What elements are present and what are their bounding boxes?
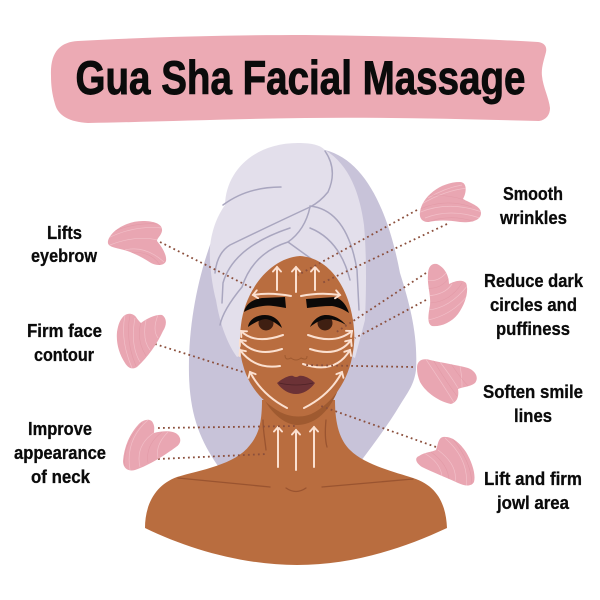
massage direction arrows (240, 267, 352, 470)
label: lifts eyebrow: eyebrow (31, 245, 98, 266)
eyebrows (244, 297, 349, 313)
label: smooth wrinkles: wrinkles (499, 207, 567, 228)
label: improve appearance of neck: Improve (28, 418, 92, 439)
label: reduce dark circles and puffiness: Reduce dark (484, 270, 584, 291)
lips (277, 376, 315, 394)
label: reduce dark circles and puffiness (484, 270, 584, 339)
label: soften smile lines: lines (514, 405, 552, 426)
gua sha stone: lifts eyebrow (108, 221, 166, 265)
towel back panel (189, 150, 416, 466)
dotted leader lines (155, 210, 447, 459)
label: soften smile lines: Soften smile (483, 381, 583, 402)
gua sha stone: lift and firm jowl area (416, 436, 474, 486)
label: smooth wrinkles: Smooth (503, 183, 563, 204)
black hair (278, 257, 322, 272)
label: soften smile lines (483, 381, 583, 426)
title banner (51, 35, 550, 123)
label: lift and firm jowl area (484, 468, 582, 513)
gua sha stone: soften smile lines (417, 359, 477, 404)
label: lift and firm jowl area: Lift and firm (484, 468, 582, 489)
neck and collarbone creases (178, 420, 413, 492)
label: lifts eyebrow: Lifts (47, 222, 82, 243)
label: improve appearance of neck: of neck (31, 466, 91, 487)
label: firm face contour: Firm face (27, 320, 102, 341)
gua sha stone: reduce dark circles (428, 264, 468, 326)
face (240, 256, 354, 416)
gua sha stone: smooth wrinkles (420, 182, 481, 222)
eyes (248, 315, 346, 330)
chin shadow (260, 390, 338, 425)
label: improve appearance of neck (14, 418, 106, 487)
gua sha stone: improve appearance of neck (123, 420, 180, 470)
label: reduce dark circles and puffiness: puffiness (496, 318, 570, 339)
label: improve appearance of neck: appearance (14, 442, 106, 463)
body: neck and shoulders (145, 390, 447, 565)
gua sha stone: firm face contour (116, 314, 166, 368)
label: firm face contour: contour (34, 344, 94, 365)
towel wrap (210, 143, 366, 358)
label: reduce dark circles and puffiness: circles and (490, 294, 577, 315)
nose (285, 355, 307, 360)
towel fold lines (215, 151, 359, 325)
label: lift and firm jowl area: jowl area (496, 492, 570, 513)
label: lifts eyebrow (31, 222, 98, 266)
label: firm face contour (27, 320, 102, 365)
label: smooth wrinkles (499, 183, 567, 228)
